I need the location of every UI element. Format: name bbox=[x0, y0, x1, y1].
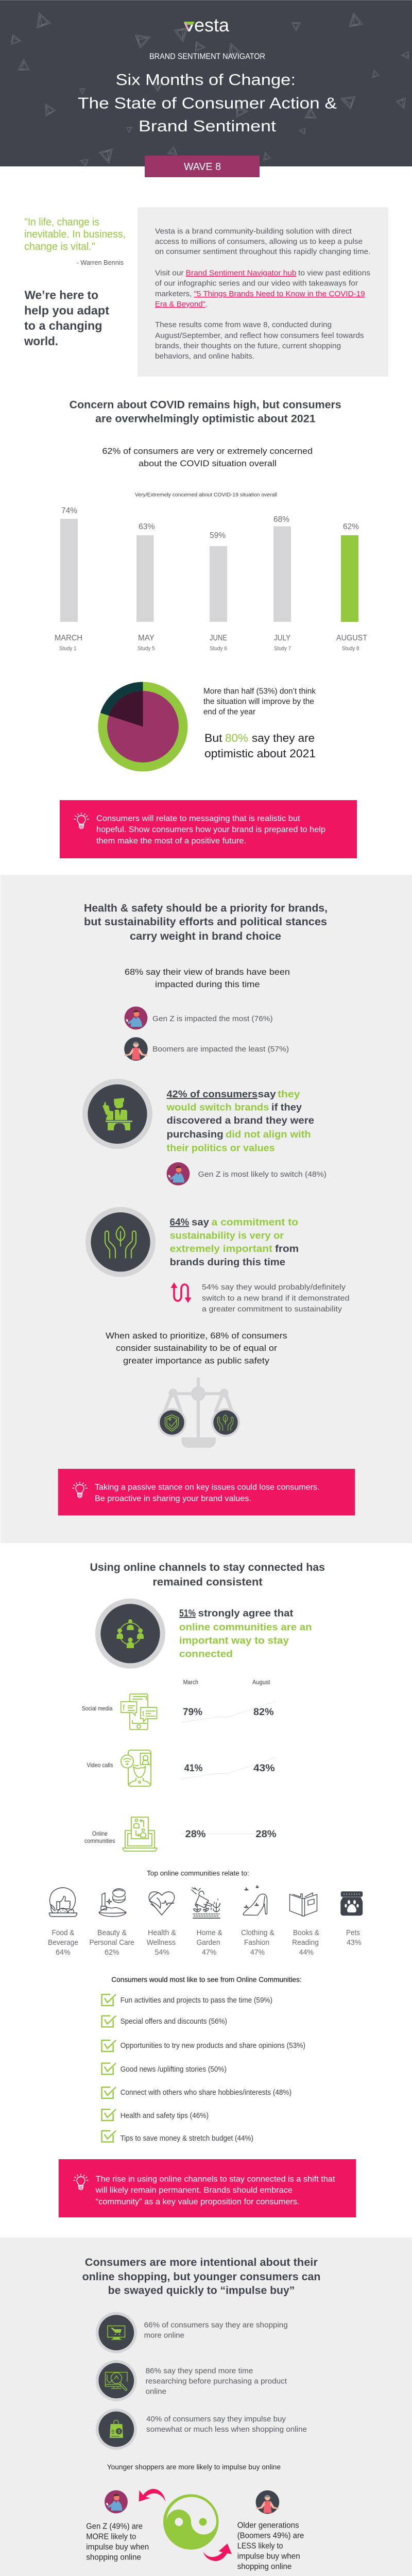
heading bbox=[82, 2257, 320, 2297]
icon: lightbulb bbox=[74, 813, 89, 828]
icon: clothing and fashion bbox=[243, 1886, 267, 1915]
callout: community value: The rise in using online channels to stay connected is a shift that bbox=[96, 2175, 335, 2183]
callout: community value: will likely remain permanent. Brands should embrace bbox=[95, 2186, 293, 2195]
text: 80% optimistic: But bbox=[204, 732, 222, 744]
text: 42% would switch brands: would switch brands bbox=[166, 1101, 269, 1113]
text: 42% would switch brands: purchasing bbox=[167, 1129, 224, 1140]
labels: community categories: 44% bbox=[299, 1948, 314, 1957]
title bbox=[78, 71, 337, 135]
text: 64% sustainability: a commitment to bbox=[212, 1217, 298, 1228]
checklist: community wants: Opportunities to try new products and share opinions (53%) bbox=[121, 2042, 305, 2050]
icon: books and reading bbox=[289, 1893, 317, 1916]
row: online communities: 28% bbox=[255, 1828, 277, 1840]
panel: covid concern bbox=[55, 399, 367, 858]
text: 42% would switch brands: their politics or values bbox=[167, 1142, 275, 1154]
text: 51% strongly agree bbox=[179, 1607, 312, 1660]
icon: beauty and personal care bbox=[99, 1889, 126, 1917]
bar chart: concern by month: MAY bbox=[138, 634, 154, 642]
labels: community categories: 47% bbox=[250, 1948, 265, 1957]
heading: carry weight in brand choice bbox=[130, 930, 281, 942]
text: 86% research: online bbox=[146, 2387, 166, 2396]
panel: intro description: Brand Sentiment Navigator hub bbox=[186, 269, 297, 278]
callout: realistic but hopeful: hopeful. Show consumers how your brand is prepared to help bbox=[96, 825, 325, 834]
text: older generations less likely: LESS likely to bbox=[237, 2542, 283, 2551]
bar chart: concern by month: 59% bbox=[210, 531, 226, 540]
panel: intro description: of our infographic series and our video with takeaways for bbox=[155, 279, 358, 287]
checklist: community wants: Good news /uplifting stories (50%) bbox=[121, 2065, 227, 2074]
icon: home and garden bbox=[192, 1888, 220, 1918]
arrow: toward gen z bbox=[139, 2489, 166, 2502]
text: situation will not improve: More than half (53%) don’t think bbox=[203, 687, 316, 696]
bar chart: concern by month: MARCH bbox=[55, 634, 82, 642]
callout: passive stance: Be proactive in sharing your brand values. bbox=[95, 1495, 251, 1503]
text: 86% research: 86% say they spend more time bbox=[146, 2366, 253, 2375]
row: social media bbox=[82, 1694, 277, 1730]
icon: boomer avatar bbox=[255, 2490, 279, 2514]
labels: community categories: Books & bbox=[293, 1928, 319, 1937]
text: 51% strongly agree: online communities are an bbox=[179, 1622, 312, 1633]
quote: change is vital." bbox=[24, 241, 95, 252]
icon: gen z avatar bbox=[105, 2490, 128, 2513]
text: situation will not improve: the situation will improve by the bbox=[203, 698, 314, 706]
panel: intro description: on consumer sentiment throughout this rapidly changing time. bbox=[155, 248, 370, 256]
wave 8 badge bbox=[145, 156, 260, 177]
callout: passive stance bbox=[58, 1469, 355, 1516]
bar chart: concern by month bbox=[55, 493, 367, 652]
text: older generations less likely: (Boomers 49%) are bbox=[237, 2531, 304, 2540]
panel: intro description: "5 Things Brands Need to Know in the COVID-19 bbox=[194, 290, 365, 298]
text: gen z most likely to switch: Gen Z is most likely to switch (48%) bbox=[198, 1170, 327, 1179]
icon: research monitor bbox=[96, 2360, 137, 2401]
row: online communities: Online bbox=[92, 1830, 108, 1837]
icon: lightbulb bbox=[73, 1482, 87, 1498]
text: older generations less likely: Older generations bbox=[237, 2521, 299, 2530]
text: 42% would switch brands: they bbox=[278, 1089, 300, 1100]
icon: food and beverage bbox=[49, 1888, 77, 1917]
icon: shopping cart monitor bbox=[96, 2312, 137, 2353]
panel: online channels bbox=[48, 1562, 363, 2217]
checklist: community wants: Connect with others who share hobbies/interests (48%) bbox=[121, 2089, 291, 2097]
text: 64% sustainability: say bbox=[192, 1217, 209, 1228]
labels: community categories: 54% bbox=[154, 1948, 169, 1957]
text: 42% would switch brands: if they bbox=[271, 1101, 302, 1113]
checklist: community wants: Health and safety tips (46%) bbox=[121, 2112, 209, 2120]
text: 42% would switch brands: did not align with bbox=[226, 1129, 311, 1140]
title: Six Months of Change: bbox=[115, 71, 296, 89]
panel: intro description bbox=[138, 207, 388, 377]
text: 64% sustainability: sustainability is very or bbox=[170, 1230, 284, 1242]
bar chart: concern by month: Study 6 bbox=[210, 646, 227, 652]
callout: community value bbox=[59, 2159, 356, 2217]
panel: intro description: to view past editions bbox=[298, 269, 370, 278]
panel: header banner bbox=[0, 0, 412, 177]
subheading: younger shoppers: Younger shoppers are more likely to impulse buy online bbox=[107, 2463, 281, 2471]
heading: Concern about COVID remains high, but consumers bbox=[70, 399, 341, 411]
text: 66% shopping more online: more online bbox=[144, 2331, 184, 2340]
row: video calls: 43% bbox=[253, 1762, 275, 1774]
text: older generations less likely: impulse buy when bbox=[237, 2552, 300, 2561]
text: 64% sustainability: 64% bbox=[170, 1217, 189, 1228]
text: 42% would switch brands bbox=[166, 1089, 314, 1154]
quote: inevitable. In business, bbox=[24, 229, 126, 240]
text: gen z more likely: Gen Z (49%) are bbox=[86, 2522, 143, 2531]
wave 8 badge: WAVE 8 bbox=[184, 161, 221, 173]
panel: intro description: access to millions of consumers, allowing us to keep a pulse bbox=[155, 238, 363, 246]
panel: intro description: August/September, and reflect how consumers feel towards bbox=[155, 332, 364, 340]
text: sustainability vs public safety bbox=[106, 1331, 287, 1365]
panel: intro description: . bbox=[205, 300, 208, 309]
text: 42% would switch brands: 42% of consumers bbox=[167, 1089, 258, 1100]
subheading: impacted during this time bbox=[155, 979, 260, 989]
subheading: 62% of consumers are very or extremely concerned bbox=[102, 446, 313, 456]
labels: community categories: Reading bbox=[292, 1938, 319, 1947]
pie chart: optimism about 2021 bbox=[98, 682, 187, 772]
icon: hands holding plant bbox=[85, 1207, 156, 1277]
text: 42% would switch brands: discovered a brand they were bbox=[167, 1115, 314, 1126]
bar chart: concern by month: Study 1 bbox=[59, 646, 76, 652]
callout: community value: “community” as a key value proposition for consumers. bbox=[96, 2198, 300, 2206]
icon: pets bbox=[341, 1892, 363, 1916]
text: 64% sustainability bbox=[170, 1217, 299, 1268]
callout: realistic but hopeful: them make the most of a positive future. bbox=[96, 837, 246, 845]
text: sustainability vs public safety: greater importance as public safety bbox=[123, 1356, 270, 1365]
label: top online communities: Top online communities relate to: bbox=[147, 1870, 249, 1877]
row: video calls: 41% bbox=[184, 1762, 202, 1774]
text: 51% strongly agree: connected bbox=[179, 1649, 233, 1660]
text: 42% would switch brands: say bbox=[258, 1089, 276, 1100]
heading: Consumers are more intentional about their bbox=[85, 2257, 318, 2268]
labels: community categories: 43% bbox=[347, 1938, 362, 1947]
text: situation will not improve: end of the year bbox=[203, 707, 255, 716]
text: 54% would switch: 54% say they would probably/definitely bbox=[202, 1283, 346, 1292]
labels: community categories: Health & bbox=[148, 1928, 176, 1937]
bar chart: concern by month: AUGUST bbox=[336, 634, 367, 642]
icon: boomer avatar bbox=[124, 1037, 148, 1061]
labels: community categories: Clothing & bbox=[241, 1928, 274, 1937]
bar chart: concern by month: Very/Extremely concerned about COVID-19 situation overall bbox=[135, 493, 277, 498]
text: 40% impulse buy less bbox=[146, 2415, 307, 2434]
quote attribution: - Warren Bennis bbox=[76, 259, 124, 266]
text: 86% research: researching before purchasing a product bbox=[146, 2377, 287, 2385]
panel: intro description: Visit our bbox=[155, 269, 184, 278]
text: 40% impulse buy less: 40% of consumers say they impulse buy bbox=[146, 2415, 286, 2424]
bar chart: concern by month: 62% bbox=[343, 522, 359, 531]
text: 51% strongly agree: 51% bbox=[179, 1607, 196, 1619]
heading bbox=[90, 1562, 325, 1588]
labels: community categories: Beverage bbox=[48, 1938, 78, 1947]
text: 80% optimistic: say they are bbox=[252, 732, 315, 744]
subheading bbox=[102, 446, 313, 468]
text: gen z more likely: impulse buy when bbox=[86, 2543, 149, 2551]
row: social media: 79% bbox=[183, 1706, 202, 1718]
bar chart: concern by month: Study 8 bbox=[342, 646, 359, 652]
callout: realistic but hopeful bbox=[60, 800, 357, 858]
text: 51% strongly agree: strongly agree that bbox=[198, 1607, 294, 1619]
text: 66% shopping more online bbox=[144, 2321, 288, 2340]
subheading: about the COVID situation overall bbox=[139, 459, 277, 468]
bar chart: concern by month: Study 7 bbox=[274, 646, 291, 652]
icon: shopping bag: $ bbox=[118, 2429, 121, 2434]
panel: intro description: brands, their thoughts on the future, current shopping bbox=[155, 342, 341, 350]
icon: gen z avatar bbox=[167, 1162, 190, 1185]
icon: shopping bag bbox=[96, 2409, 137, 2450]
chart: channel use march vs august: March bbox=[183, 1680, 198, 1686]
chart: channel use march vs august bbox=[82, 1680, 277, 1851]
labels: community categories: 47% bbox=[202, 1948, 216, 1957]
bar chart: concern by month: Study 5 bbox=[138, 646, 154, 652]
text: 54% would switch: switch to a new brand if it demonstrated bbox=[202, 1294, 350, 1302]
bar chart: concern by month: JULY bbox=[274, 634, 290, 642]
subheading: 68% say their view of brands have been bbox=[125, 967, 290, 977]
icon: community ring bbox=[95, 1599, 165, 1669]
statement: here to help: help you adapt bbox=[24, 304, 109, 317]
statement: here to help: to a changing bbox=[24, 319, 102, 332]
heading: remained consistent bbox=[152, 1576, 263, 1588]
labels: community categories: Wellness bbox=[147, 1938, 176, 1947]
quote: "In life, change is bbox=[24, 216, 99, 228]
chart: channel use march vs august: August bbox=[252, 1680, 270, 1686]
icon: politician at podium bbox=[82, 1079, 152, 1149]
text: gen z more likely: MORE likely to bbox=[86, 2533, 136, 2541]
labels: community categories: Garden bbox=[197, 1938, 220, 1947]
logo: vesta: esta bbox=[194, 14, 230, 36]
row: video calls bbox=[87, 1750, 277, 1786]
heading bbox=[70, 399, 341, 425]
text: 64% sustainability: brands during this time bbox=[170, 1257, 285, 1268]
text: gen z more likely: shopping online bbox=[86, 2553, 141, 2562]
text: boomers impacted: Boomers are impacted the least (57%) bbox=[152, 1045, 289, 1054]
title: The State of Consumer Action & bbox=[78, 94, 337, 112]
icon: yin yang bbox=[163, 2494, 219, 2550]
icon: balance scale bbox=[158, 1377, 240, 1448]
labels: community categories: Pets bbox=[346, 1928, 360, 1937]
bar chart: concern by month: 63% bbox=[139, 522, 155, 531]
label: consumers would most like: Consumers would most like to see from Online Communities: bbox=[111, 1975, 302, 1984]
checklist: community wants bbox=[102, 1994, 305, 2143]
quote bbox=[24, 216, 126, 252]
panel: intro description: marketers, bbox=[155, 290, 192, 298]
row: social media: f bbox=[123, 1704, 125, 1713]
labels: community categories: Personal Care bbox=[90, 1938, 134, 1947]
labels: community categories: Fashion bbox=[244, 1938, 269, 1947]
text: situation will not improve bbox=[203, 687, 316, 716]
bar chart: concern by month: 68% bbox=[273, 515, 289, 524]
icon: lightbulb bbox=[74, 2174, 88, 2190]
labels: community categories: Food & bbox=[52, 1928, 74, 1937]
panel: intentional shopping bbox=[0, 2238, 412, 2576]
text: 51% strongly agree: important way to stay bbox=[179, 1635, 289, 1647]
heading: be swayed quickly to “impulse buy” bbox=[108, 2285, 295, 2297]
checklist: community wants: Fun activities and projects to pass the time (59%) bbox=[121, 1996, 272, 2005]
heading: but sustainability efforts and political stances bbox=[84, 916, 327, 928]
subheading bbox=[125, 967, 290, 989]
eyebrow: brand sentiment navigator: BRAND SENTIMENT NAVIGATOR bbox=[149, 53, 265, 61]
icon: switch arrows bbox=[171, 1282, 192, 1303]
panel: intro description: Era & Beyond" bbox=[155, 300, 205, 309]
bar chart: concern by month: JUNE bbox=[210, 634, 227, 642]
panel: intro description: behaviors, and online habits. bbox=[155, 352, 254, 361]
icon row: community categories bbox=[49, 1886, 363, 1918]
text: 64% sustainability: extremely important bbox=[170, 1243, 273, 1255]
text: sustainability vs public safety: consider sustainability to be of equal or bbox=[116, 1343, 277, 1353]
labels: community categories: Home & bbox=[197, 1928, 222, 1937]
text: 64% sustainability: from bbox=[275, 1243, 299, 1255]
text: 80% optimistic: 80% bbox=[225, 732, 248, 744]
checklist: community wants: Special offers and discounts (56%) bbox=[121, 2018, 227, 2026]
text: 66% shopping more online: 66% of consumers say they are shopping bbox=[144, 2321, 288, 2330]
checklist: community wants: Tips to save money & stretch budget (44%) bbox=[121, 2134, 253, 2143]
heading bbox=[84, 903, 328, 942]
heading: are overwhelmingly optimistic about 2021 bbox=[95, 413, 316, 425]
text: older generations less likely: shopping online bbox=[237, 2562, 291, 2571]
labels: community categories: 62% bbox=[105, 1948, 119, 1957]
row: social media: Social media bbox=[82, 1705, 113, 1712]
panel: intro description: These results come from wave 8, conducted during bbox=[155, 321, 332, 329]
statement: here to help bbox=[24, 289, 109, 348]
text: 54% would switch bbox=[202, 1283, 350, 1313]
row: video calls: Video calls bbox=[87, 1761, 113, 1769]
title: Brand Sentiment bbox=[139, 117, 276, 135]
labels: community categories: 64% bbox=[56, 1948, 71, 1957]
panel: health and sustainability bbox=[1, 875, 412, 1543]
statement: here to help: world. bbox=[24, 334, 58, 348]
row: online communities: communities bbox=[84, 1837, 115, 1844]
row: social media: t bbox=[142, 1709, 145, 1718]
row: online communities bbox=[84, 1817, 277, 1851]
text: 54% would switch: a greater commitment to sustainability bbox=[202, 1304, 342, 1313]
text: older generations less likely bbox=[237, 2521, 304, 2571]
text: 80% optimistic bbox=[204, 732, 316, 760]
arrow: toward boomers bbox=[203, 2544, 232, 2561]
statement: here to help: We’re here to bbox=[25, 289, 98, 302]
bar chart: concern by month: 74% bbox=[61, 506, 77, 515]
labels: community categories: Beauty & bbox=[97, 1928, 127, 1937]
text: 80% optimistic: optimistic about 2021 bbox=[204, 747, 316, 760]
text: 86% research bbox=[146, 2366, 287, 2396]
text: gen z more likely bbox=[86, 2522, 149, 2562]
panel: intro quote bbox=[24, 216, 126, 348]
row: online communities: 28% bbox=[185, 1828, 206, 1840]
heading: Health & safety should be a priority for brands, bbox=[84, 903, 328, 914]
callout: passive stance: Taking a passive stance on key issues could lose consumers. bbox=[95, 1483, 319, 1492]
callout: realistic but hopeful: Consumers will relate to messaging that is realistic but bbox=[96, 814, 300, 823]
panel: intro description: Vesta is a brand community-building solution with direct bbox=[155, 228, 352, 236]
icon: gen z avatar bbox=[125, 1007, 147, 1029]
row: social media: 82% bbox=[253, 1706, 274, 1718]
text: sustainability vs public safety: When asked to prioritize, 68% of consumers bbox=[106, 1331, 287, 1341]
text: 40% impulse buy less: somewhat or much less when shopping online bbox=[146, 2425, 307, 2434]
heading: online shopping, but younger consumers can bbox=[82, 2271, 320, 2283]
text: gen z impacted: Gen Z is impacted the most (76%) bbox=[152, 1014, 273, 1023]
labels: community categories bbox=[48, 1928, 362, 1957]
icon: health and wellness bbox=[149, 1892, 175, 1915]
heading: Using online channels to stay connected has bbox=[90, 1562, 325, 1573]
